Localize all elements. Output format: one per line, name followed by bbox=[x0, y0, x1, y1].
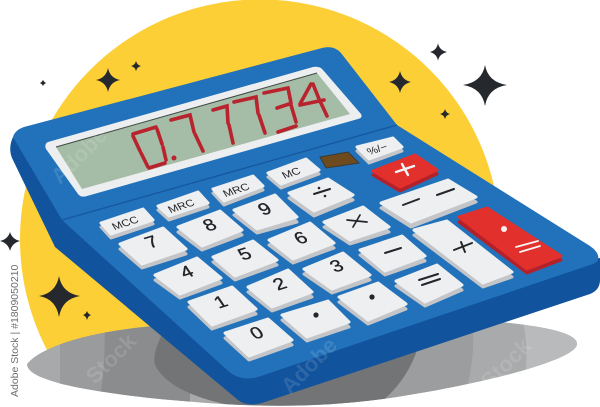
key MRC: MRC bbox=[166, 198, 197, 216]
key 6: 6 bbox=[290, 229, 312, 249]
watermark text bbox=[46, 122, 546, 399]
key 9 bbox=[234, 195, 297, 233]
key 2 bbox=[248, 270, 312, 311]
watermark text: Stock bbox=[486, 128, 546, 189]
red equals key bbox=[459, 208, 561, 273]
stock id side text: Adobe Stock | #1809050210 bbox=[9, 265, 21, 397]
sparkle stars bbox=[0, 43, 507, 320]
key percent bbox=[357, 138, 402, 163]
seam line bbox=[62, 125, 397, 220]
watermark text: Stock bbox=[476, 333, 536, 394]
key 3 bbox=[304, 253, 370, 293]
yellow background circle bbox=[20, 0, 500, 350]
calculator body side bbox=[10, 137, 600, 404]
key MRC 2 bbox=[213, 176, 263, 205]
display digits 0.77734 bbox=[133, 84, 327, 168]
key 5: 5 bbox=[234, 245, 256, 265]
key MC bbox=[268, 159, 319, 188]
divide key bbox=[289, 179, 353, 216]
key 0: 0 bbox=[246, 324, 268, 344]
key 4: 4 bbox=[176, 263, 198, 283]
red plus key bbox=[373, 155, 437, 191]
minus key bbox=[360, 236, 425, 275]
watermark text: Adobe bbox=[276, 332, 342, 399]
key MRC 2: MRC bbox=[221, 182, 252, 200]
key 8 bbox=[178, 211, 242, 250]
key 9: 9 bbox=[254, 200, 276, 220]
key MC: MC bbox=[280, 166, 303, 181]
key 3: 3 bbox=[326, 257, 348, 277]
multiply key bbox=[324, 207, 389, 244]
key 2: 2 bbox=[269, 275, 291, 295]
key 7: 7 bbox=[141, 233, 163, 253]
ground shadow bbox=[27, 322, 577, 406]
key 7 bbox=[120, 228, 186, 268]
key 1 bbox=[189, 287, 256, 329]
watermark text: Stock bbox=[81, 328, 141, 389]
dot key right bbox=[339, 283, 406, 324]
key 6 bbox=[269, 223, 334, 263]
key MCC: MCC bbox=[110, 215, 141, 233]
dot key left bbox=[282, 301, 349, 341]
wide minus key bbox=[381, 180, 476, 227]
key 4 bbox=[155, 258, 221, 298]
key 8: 8 bbox=[199, 216, 221, 236]
display bezel bbox=[45, 67, 362, 197]
key percent: %/− bbox=[365, 142, 390, 158]
tall plus key bbox=[414, 221, 512, 287]
solar panel bbox=[320, 152, 359, 168]
key 5 bbox=[213, 241, 277, 280]
LCD screen bbox=[56, 73, 350, 189]
key 1: 1 bbox=[210, 293, 232, 313]
calculator top face bbox=[13, 47, 598, 378]
equals key bbox=[396, 265, 462, 306]
key 0 bbox=[225, 319, 292, 360]
watermark text: Adobe bbox=[46, 122, 112, 189]
key MRC bbox=[158, 192, 208, 220]
key MCC bbox=[101, 209, 153, 238]
